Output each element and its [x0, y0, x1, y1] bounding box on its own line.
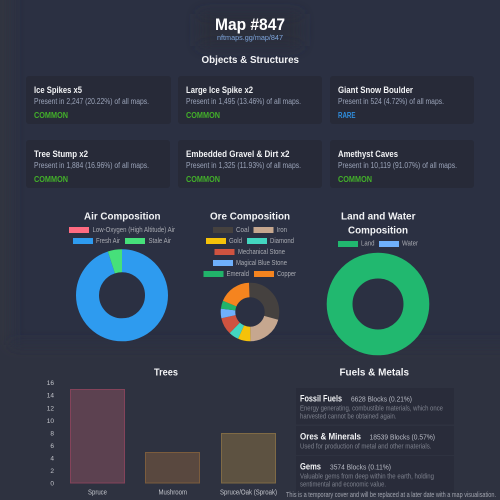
- panel: ores and minerals: [296, 426, 454, 455]
- panel: fossil fuels: Energy generating, combustible materials, which once: [300, 406, 443, 412]
- card: tree stump: Present in 1,884 (16.96%) of all maps.: [34, 161, 149, 170]
- legend: air composition: [69, 227, 176, 245]
- panel: gems: sentimental and economic value.: [300, 482, 386, 488]
- card: large ice spike: COMMON: [186, 111, 220, 120]
- bar: spruce: [70, 390, 124, 483]
- heading: objects and structures: Objects & Structures: [202, 54, 299, 66]
- legend: ore composition: [204, 227, 297, 278]
- card: embedded gravel and dirt: [178, 140, 322, 188]
- panel: ores and minerals: Ores & Minerals: [300, 432, 361, 442]
- y axis labels: 16: [47, 380, 54, 387]
- heading: air composition: Air Composition: [84, 210, 160, 222]
- legend: land and water: [338, 240, 419, 248]
- bar chart: trees: [47, 380, 277, 496]
- heading: trees: Trees: [154, 366, 178, 378]
- title: Map #847: [215, 16, 285, 34]
- card: giant snow boulder: Giant Snow Boulder: [338, 85, 413, 95]
- panel: gems: 3574 Blocks (0.11%): [330, 462, 391, 472]
- legend: ore composition: Gold: [229, 238, 242, 245]
- card: ice spikes: Ice Spikes x5: [34, 85, 82, 95]
- legend: ore composition: Mechanical Stone: [238, 249, 285, 256]
- card: ice spikes: Present in 2,247 (20.22%) of all maps.: [34, 97, 149, 106]
- card: giant snow boulder: [330, 76, 474, 124]
- y axis labels: 10: [47, 418, 54, 425]
- card: embedded gravel and dirt: COMMON: [186, 175, 220, 184]
- heading: fuels and metals: Fuels & Metals: [340, 366, 409, 378]
- heading: land and water composition: [341, 210, 416, 236]
- card: amethyst caves: COMMON: [338, 175, 372, 184]
- y axis labels: 6: [50, 443, 54, 450]
- legend: ore composition: Copper: [277, 271, 297, 278]
- card: amethyst caves: Present in 10,119 (91.07%) of all maps.: [338, 161, 457, 170]
- card: large ice spike: [178, 76, 322, 124]
- card: tree stump: [26, 140, 170, 188]
- panel: ores and minerals: Used for production of metal and other materials.: [300, 444, 432, 450]
- y axis labels: 2: [50, 468, 54, 475]
- bar: mushroom: [146, 452, 200, 483]
- panel: fossil fuels: [296, 388, 454, 424]
- donut: ore composition: [228, 290, 272, 334]
- heading: ore composition: Ore Composition: [210, 210, 290, 222]
- legend: air composition: Fresh Air: [96, 238, 121, 245]
- x axis labels: Mushroom: [158, 490, 187, 496]
- x axis labels: Spruce/Oak (Sproak): [220, 490, 277, 496]
- panel: fossil fuels: harvested cannot be obtained again.: [300, 414, 397, 420]
- card: ice spikes: [26, 76, 171, 124]
- legend: air composition: Stale Air: [148, 238, 172, 245]
- card: embedded gravel and dirt: Present in 1,325 (11.93%) of all maps.: [186, 161, 301, 170]
- bar: spruce/oak: [222, 434, 276, 483]
- card: embedded gravel and dirt: Embedded Gravel & Dirt x2: [186, 149, 290, 159]
- subtitle link: nftmaps.gg/map/847: [217, 33, 283, 42]
- legend: ore composition: Emerald: [226, 271, 249, 278]
- x axis labels: Spruce: [88, 490, 107, 496]
- card: amethyst caves: [330, 140, 474, 188]
- heading: land and water composition: Composition: [348, 224, 408, 236]
- card: tree stump: COMMON: [34, 175, 68, 184]
- x axis labels: [88, 490, 277, 496]
- card: giant snow boulder: RARE: [338, 111, 356, 120]
- legend: land and water: Land: [361, 240, 375, 248]
- panel: gems: Gems: [300, 462, 321, 472]
- panel: gems: [296, 456, 454, 492]
- legend: ore composition: Magical Blue Stone: [236, 260, 287, 267]
- panel: fossil fuels: 6628 Blocks (0.21%): [351, 394, 412, 404]
- donut: air composition: [88, 261, 156, 330]
- legend: ore composition: Coal: [236, 227, 249, 234]
- card: tree stump: Tree Stump x2: [34, 149, 88, 159]
- y axis labels: 12: [47, 405, 54, 412]
- card: large ice spike: Large Ice Spike x2: [186, 85, 253, 95]
- card: large ice spike: Present in 1,495 (13.46%) of all maps.: [186, 97, 301, 106]
- legend: ore composition: Iron: [276, 227, 287, 234]
- legend: ore composition: Diamond: [270, 238, 294, 245]
- card: amethyst caves: Amethyst Caves: [338, 149, 398, 159]
- y axis labels: [47, 380, 54, 488]
- y axis labels: 4: [50, 456, 54, 463]
- y axis labels: 8: [50, 430, 54, 438]
- donut: land and water: [340, 266, 416, 342]
- card: ice spikes: COMMON: [34, 111, 68, 120]
- y axis labels: 14: [47, 393, 54, 400]
- heading: land and water composition: Land and Water: [341, 210, 416, 222]
- panel: ores and minerals: 18539 Blocks (0.57%): [370, 432, 435, 442]
- legend: land and water: Water: [402, 240, 419, 248]
- panel: gems: Valuable gems from deep within the earth, holding: [300, 474, 434, 480]
- y axis labels: 0: [50, 480, 54, 488]
- card: giant snow boulder: Present in 524 (4.72%) of all maps.: [338, 97, 444, 106]
- legend: air composition: Low-Oxygen (High Altitude) Air: [92, 227, 176, 234]
- panel: fossil fuels: Fossil Fuels: [300, 394, 342, 404]
